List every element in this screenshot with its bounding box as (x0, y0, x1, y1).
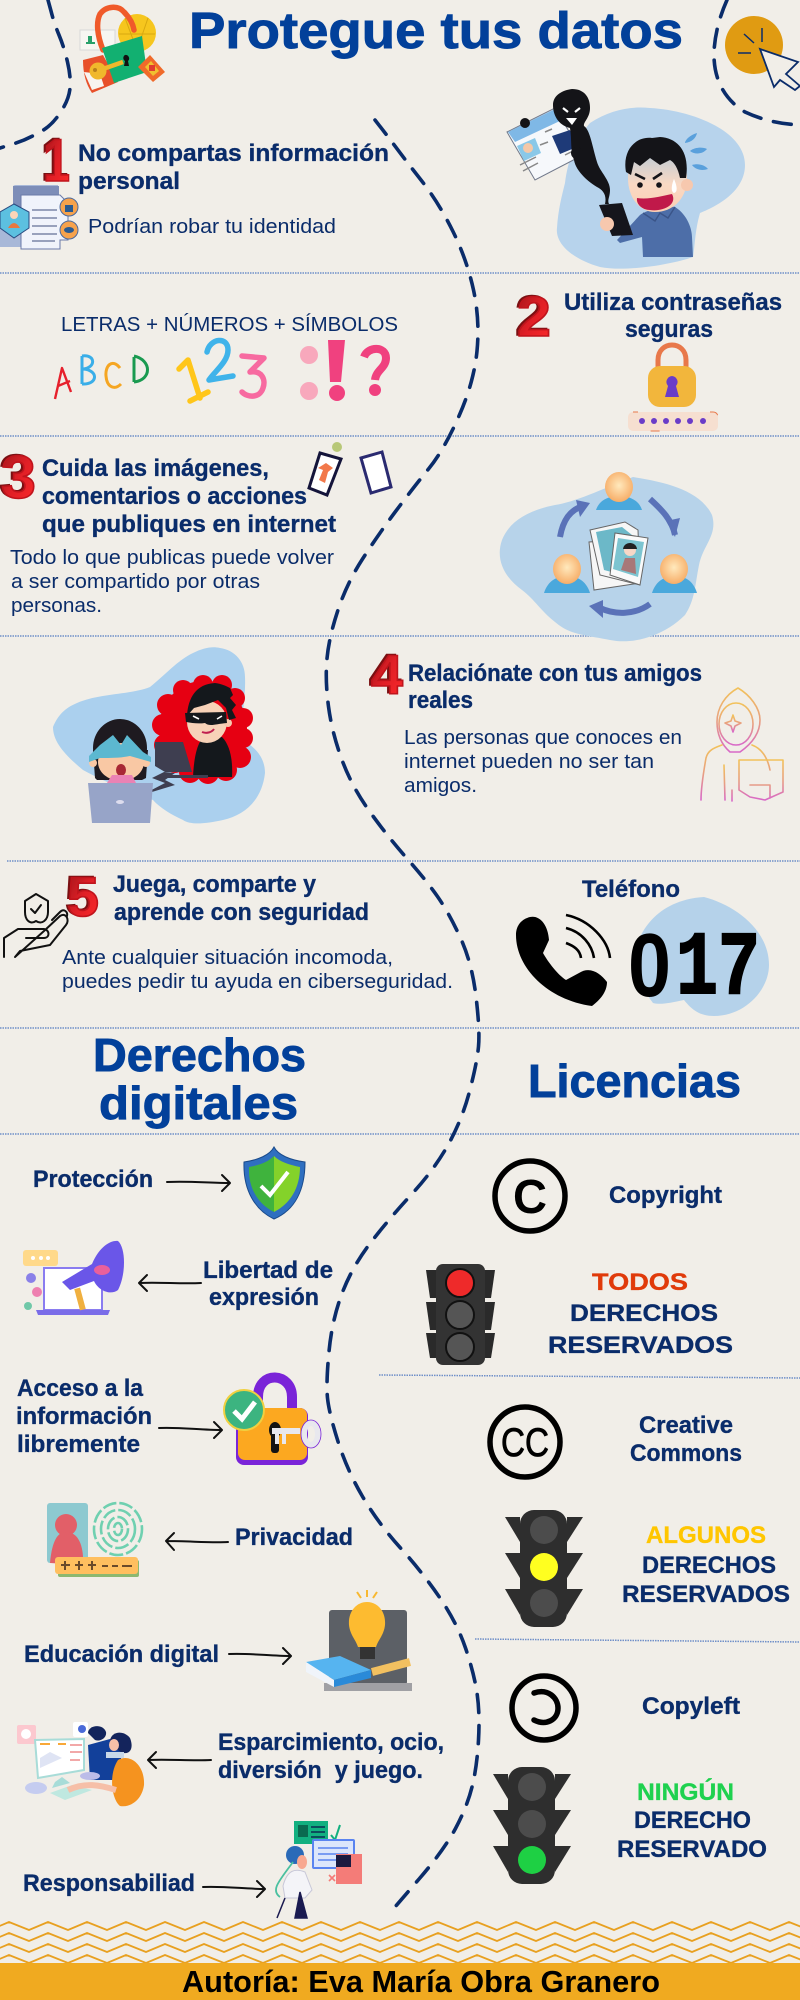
label: responsabilidad: Responsabiliad (23, 1870, 195, 1897)
heading: derechos digitales (93, 1029, 306, 1129)
icon: document with shield and padlock (0, 185, 78, 249)
label: esparcimiento: diversión y juego. (218, 1757, 423, 1784)
step 3 text: a ser compartido por otras (11, 571, 260, 593)
step 2 heading: Utiliza contraseñas (564, 289, 782, 316)
license text: ningun derecho reservado: DERECHO (634, 1807, 751, 1834)
icon: telephone handset (516, 915, 610, 1006)
step 4 number: 4 (371, 643, 403, 706)
label: acceso a la informacion: información (16, 1403, 152, 1430)
step 5 heading (113, 871, 369, 926)
title: Protegue tus datos (189, 2, 683, 59)
step 3 text (10, 547, 334, 617)
license text: todos derechos reservados: RESERVADOS (548, 1332, 733, 1359)
footer bar: Autoría: Eva María Obra Granero (182, 1964, 660, 1999)
arrow: privacidad (166, 1533, 228, 1550)
label: privacidad: Privacidad (235, 1524, 353, 1551)
icon: padlock with key and check (224, 1377, 321, 1465)
step 3 text: personas. (11, 595, 102, 617)
step 5 text (62, 947, 453, 993)
icon: megaphone on laptop (23, 1241, 124, 1315)
step 1 heading: personal (78, 168, 180, 195)
step 2 number: 2 (517, 285, 551, 349)
icon: hand holding shield (4, 894, 68, 957)
icon: green shield (244, 1147, 305, 1219)
icon: two smartphones (309, 442, 391, 495)
icon: security lock collage (80, 7, 165, 93)
label: educacion digital: Educación digital (24, 1641, 219, 1668)
step 5 heading: aprende con seguridad (114, 899, 369, 926)
step 3 heading: comentarios o acciones (42, 483, 307, 510)
license text: ningun derecho reservado: RESERVADO (617, 1836, 767, 1863)
step 1 heading: No compartas información (78, 140, 389, 167)
colourful letters, numbers and symbols (55, 340, 386, 401)
dashed arc: top right (714, 0, 800, 125)
heading: licencias: Licencias (528, 1055, 741, 1107)
emergency number 017 (628, 916, 760, 1021)
icon: clock with cursor (725, 16, 800, 90)
label: copyleft: Copyleft (642, 1693, 740, 1720)
heading: derechos digitales: Derechos (93, 1029, 306, 1081)
step 1 text: Podrían robar tu identidad (88, 216, 336, 238)
step 3 text: Todo lo que publicas puede volver (10, 547, 334, 569)
dashed route: main (326, 120, 479, 1907)
label: libertad de expresion (203, 1257, 333, 1311)
step 4 heading: Relaciónate con tus amigos (408, 660, 702, 687)
step 5 text: puedes pedir tu ayuda en ciberseguridad. (62, 971, 453, 993)
license text: algunos derechos reservados (622, 1522, 790, 1608)
license text: algunos derechos reservados: ALGUNOS (646, 1522, 766, 1549)
label: libertad de expresion: expresión (209, 1284, 319, 1311)
arrow: esparcimiento (148, 1752, 211, 1768)
step 4 text: amigos. (404, 775, 477, 797)
license text: ningun derecho reservado (617, 1778, 767, 1863)
label: creative commons (630, 1412, 742, 1467)
dashed arc: top left (0, 0, 70, 148)
icon: light bulb with book and tablet (306, 1590, 412, 1691)
emergency number 017: 0 (628, 916, 671, 1016)
footer bar (0, 1963, 800, 2000)
icon: red traffic light (426, 1264, 495, 1365)
step 4 text (404, 727, 682, 797)
icon: creative commons symbol: CC (501, 1421, 549, 1465)
icon: copyleft symbol (512, 1676, 576, 1740)
arrow: educacion (229, 1648, 291, 1664)
step 1 heading (78, 140, 389, 195)
arrow: acceso (159, 1422, 222, 1438)
license text: ningun derecho reservado: NINGÚN (637, 1778, 734, 1806)
arrow: proteccion (167, 1175, 230, 1191)
right label: proteccion: Protección (33, 1166, 153, 1193)
step 4 heading (408, 660, 702, 714)
illustration: sharing photos among people (500, 472, 713, 641)
label: acceso a la informacion: libremente (17, 1431, 140, 1458)
label: creative commons: Commons (630, 1440, 742, 1467)
step 4 text: internet pueden no ser tan (404, 751, 654, 773)
label: creative commons: Creative (639, 1412, 733, 1439)
icon: copyright symbol: C (513, 1171, 547, 1224)
icon: woman reviewing documents (276, 1821, 362, 1918)
icon: hooded hacker outline (701, 688, 783, 801)
icon: creative commons symbol (490, 1407, 560, 1477)
label: acceso a la informacion: Acceso a la (17, 1375, 144, 1402)
step 1 number: 1 (43, 127, 70, 194)
step 3 heading (42, 455, 336, 538)
label: copyright: Copyright (609, 1182, 722, 1209)
step 2 heading: seguras (625, 316, 713, 343)
step 4 heading: reales (408, 687, 473, 714)
icon: padlock with password field (628, 345, 718, 431)
illustration: hacker stealing data from boy (507, 89, 745, 269)
icon: copyright symbol (495, 1161, 565, 1231)
illustration: girl scared by masked thief (53, 647, 265, 823)
step 5 heading: Juega, comparte y (113, 871, 317, 898)
emergency number 017: 17 (676, 919, 760, 1021)
step 2 hint: letters numbers symbols: LETRAS + NÚMEROS + SÍMBOLOS (61, 313, 398, 336)
step 2 heading (564, 289, 782, 343)
label: esparcimiento: Esparcimiento, ocio, (218, 1729, 444, 1756)
label: acceso a la informacion (16, 1375, 152, 1458)
license text: algunos derechos reservados: RESERVADOS (622, 1581, 790, 1608)
step 3 heading: Cuida las imágenes, (42, 455, 269, 482)
license text: todos derechos reservados: TODOS (592, 1269, 688, 1296)
license text: algunos derechos reservados: DERECHOS (642, 1552, 776, 1579)
step 3 heading: que publiques en internet (42, 511, 336, 538)
arrow: libertad (139, 1275, 201, 1291)
zigzag decoration (0, 1922, 800, 1963)
license text: todos derechos reservados (548, 1269, 733, 1359)
icon: privacy card with fingerprint (47, 1503, 142, 1577)
icon: green traffic light (493, 1767, 571, 1884)
illustration: people using computer and games (17, 1722, 144, 1806)
step 5 text: Ante cualquier situación incomoda, (62, 947, 393, 969)
label: libertad de expresion: Libertad de (203, 1257, 333, 1284)
step 4 text: Las personas que conoces en (404, 727, 682, 749)
step 5 number: 5 (67, 865, 99, 928)
heading: derechos digitales: digitales (99, 1077, 298, 1129)
arrow: responsabilidad (203, 1881, 265, 1897)
license text: todos derechos reservados: DERECHOS (570, 1300, 718, 1327)
icon: yellow traffic light (505, 1510, 583, 1627)
phone number heading: Teléfono (582, 876, 680, 903)
phone number blob (634, 897, 769, 1016)
label: esparcimiento (218, 1729, 444, 1784)
step 3 number: 3 (1, 444, 36, 511)
